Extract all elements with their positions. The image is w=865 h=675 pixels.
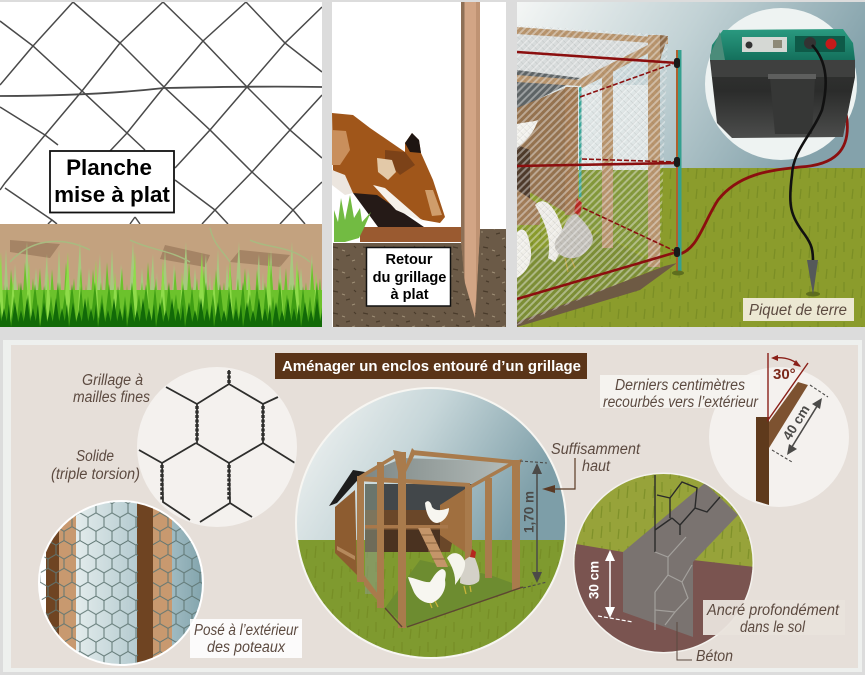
earth stake xyxy=(806,260,820,296)
label: Solide (triple torsion): (triple torsion) xyxy=(51,466,140,483)
label: Piquet de terre: Piquet de terre xyxy=(749,302,847,319)
energiser box xyxy=(710,29,855,138)
soil xyxy=(333,229,506,327)
circle: bent top of post: 30° xyxy=(773,366,796,383)
panel: electric fence xyxy=(517,2,865,327)
label: Posé à l'extérieur des poteaux xyxy=(190,619,302,658)
label: Ancré profondément dans le sol: dans le sol xyxy=(740,619,805,636)
title: Aménager un enclos entouré d’un grillage xyxy=(282,359,581,375)
shelf and ladder xyxy=(365,525,448,567)
tuft of grass xyxy=(334,195,371,242)
floor outline xyxy=(385,587,523,627)
black earth wire xyxy=(790,45,826,262)
panel: flat plank photo xyxy=(0,2,322,327)
arrow: sufficiently high xyxy=(542,458,575,493)
grass xyxy=(574,474,752,570)
label: Suffisamment haut xyxy=(551,441,641,475)
chain-link fence xyxy=(0,2,322,224)
wooden frame xyxy=(357,448,522,628)
grass xyxy=(0,224,322,327)
label: Planche mise à plat xyxy=(50,151,174,212)
soil xyxy=(574,544,752,652)
flat return plank xyxy=(360,227,462,242)
label: Ancré profondément dans le sol: Ancré profondément xyxy=(706,602,840,619)
electric post with insulators xyxy=(672,50,684,276)
label: Grillage à mailles fines xyxy=(73,372,150,406)
dimension 30 cm: 30 cm xyxy=(587,561,602,599)
circle: main enclosure xyxy=(295,387,567,660)
label: Ancré profondément dans le sol xyxy=(703,600,845,636)
bark marks xyxy=(10,240,290,267)
hut back and walls xyxy=(329,470,472,594)
leader: Béton xyxy=(677,622,692,660)
halo behind energiser xyxy=(705,8,857,160)
panel: fox and buried fence xyxy=(332,2,506,327)
label: Posé à l'extérieur des poteaux: Posé à l’extérieur xyxy=(194,622,299,639)
translucent roof xyxy=(357,458,512,483)
enclosure floor xyxy=(385,560,523,627)
circle: bent top of post xyxy=(709,353,849,507)
label: Derniers centimètres: Derniers centimètres xyxy=(615,377,745,394)
meadow xyxy=(517,168,865,327)
label: Suffisamment haut: Suffisamment xyxy=(551,441,641,458)
wooden post xyxy=(461,2,480,318)
sky xyxy=(517,2,865,169)
red fence wires xyxy=(517,45,847,299)
circle: hexagonal wire detail xyxy=(137,367,297,527)
label: Derniers centimètres xyxy=(600,375,760,411)
circle: buried fence in concrete xyxy=(570,470,760,660)
label: Retour du grillage à plat: du grillage xyxy=(373,270,446,286)
label: Derniers centimètres: recourbés vers l’extérieur xyxy=(603,394,759,411)
label: Posé à l'extérieur des poteaux: des poteaux xyxy=(207,639,286,656)
label: Grillage à mailles fines: mailles fines xyxy=(73,389,150,406)
circle: mesh outside posts xyxy=(38,500,204,666)
hens xyxy=(517,120,593,278)
label: Planche mise à plat: Planche xyxy=(66,155,152,180)
wooden plank xyxy=(0,224,322,290)
label: Suffisamment haut: haut xyxy=(582,458,611,475)
wire mesh xyxy=(655,475,720,630)
label: Béton: Béton xyxy=(696,648,733,665)
label: Piquet de terre xyxy=(743,298,854,321)
label: Retour du grillage à plat: à plat xyxy=(390,287,429,303)
ground xyxy=(295,540,567,660)
height dimension 1,70 m: 1,70 m xyxy=(522,491,537,533)
label: Grillage à mailles fines: Grillage à xyxy=(82,372,143,389)
height dimension 1,70 m xyxy=(520,461,547,588)
dimension 30 cm xyxy=(587,550,633,622)
label: Solide (triple torsion) xyxy=(51,448,140,483)
label: Retour du grillage à plat xyxy=(366,248,450,306)
chicken coop behind mesh xyxy=(517,25,677,327)
panel: enclosure infographic xyxy=(3,340,862,675)
label: Planche mise à plat: mise à plat xyxy=(54,182,170,207)
fox xyxy=(332,113,445,227)
label: Retour du grillage à plat: Retour xyxy=(385,252,433,268)
hens xyxy=(408,501,480,608)
circle: bent top of post: 40 cm xyxy=(780,402,813,443)
concrete xyxy=(623,483,738,637)
title xyxy=(275,353,587,379)
label: Solide (triple torsion): Solide xyxy=(76,448,114,465)
